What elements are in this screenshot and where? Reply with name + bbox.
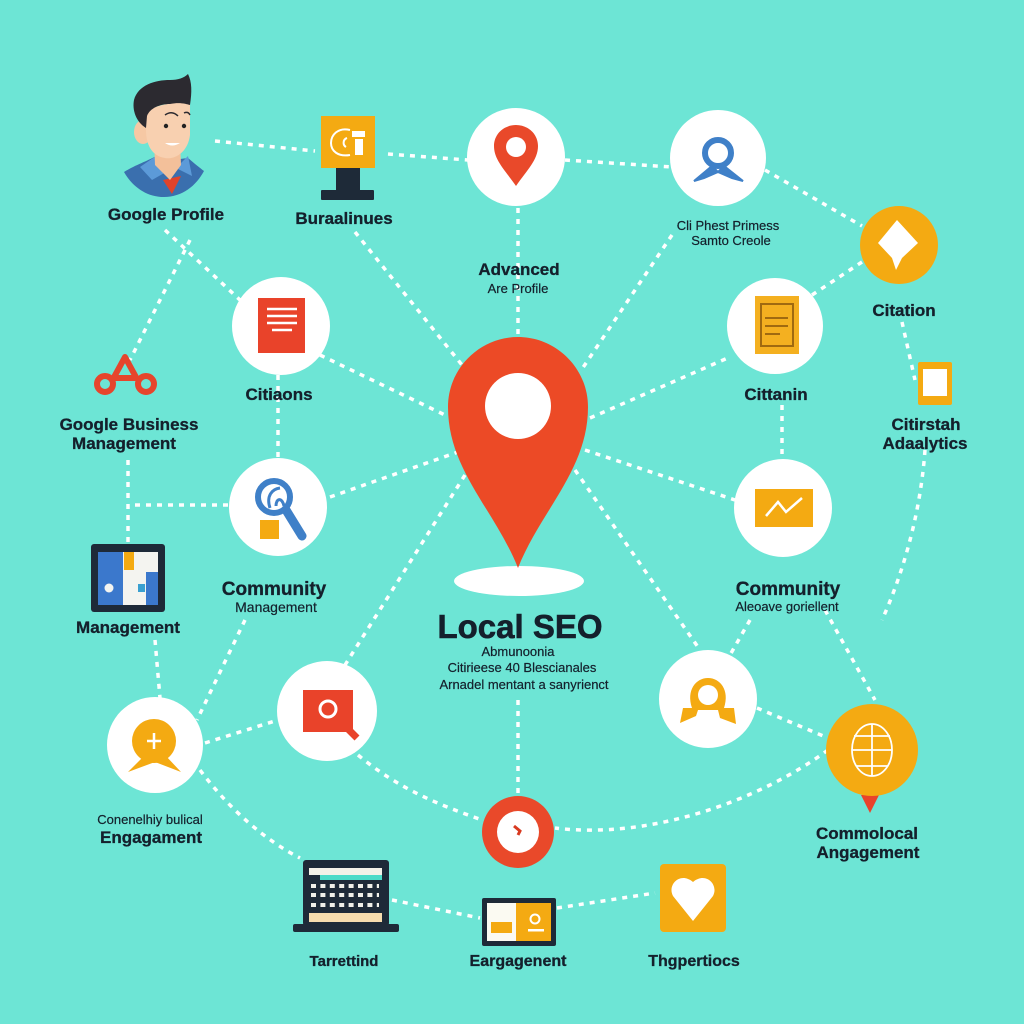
label: Advanced Profile xyxy=(478,260,560,296)
label: Commolocal Angagement xyxy=(816,824,920,862)
title: Local SEO: Abmunoonia xyxy=(482,644,555,659)
label: Google Business Management xyxy=(60,415,198,453)
title: Local SEO xyxy=(437,608,609,692)
icon: heart tile xyxy=(660,864,726,932)
icon: yellow board xyxy=(321,116,375,200)
label: Commolocal Angagement: Commolocal xyxy=(816,824,918,843)
label: Engagement left: Engagament xyxy=(100,828,202,847)
icon: tablet Eargagement xyxy=(482,898,556,946)
label: Management: Management xyxy=(76,618,180,637)
label: Google Business Management: Management xyxy=(72,434,176,453)
icon: yellow document circle xyxy=(727,278,823,374)
label: Citations: Citiaons xyxy=(245,385,313,404)
icon: yellow person circle xyxy=(659,650,757,748)
title: Local SEO: Arnadel mentant a sanyrienct xyxy=(439,677,609,692)
label: Tarrettind: Tarrettind xyxy=(310,953,378,970)
label: Cil Phest Primess: Samto Creole xyxy=(691,233,771,248)
label: Community Management left: Management xyxy=(235,599,317,615)
icon: yellow plus circle xyxy=(107,697,203,793)
label: Community right: Community xyxy=(736,579,841,600)
label: Buraalinues: Buraalinues xyxy=(295,209,393,228)
label: Google Business Management: Google Business xyxy=(60,415,198,434)
label: Engagement left xyxy=(97,812,203,847)
icon: red scissors A xyxy=(97,357,154,392)
icon: blue person circle xyxy=(670,110,766,206)
label: Advanced Profile: Advanced xyxy=(478,260,560,279)
label: Thgpertiocs: Thgpertiocs xyxy=(648,953,740,970)
label: Google Profile: Google Profile xyxy=(108,205,224,224)
label: Advanced Profile: Are Profile xyxy=(488,281,548,296)
label: Community right xyxy=(735,579,841,614)
icon: tablet Management xyxy=(91,544,165,612)
icon: red search circle xyxy=(277,661,377,761)
title: Local SEO: Local SEO xyxy=(437,608,603,645)
icon: magnifier circle xyxy=(229,458,327,556)
label: Cil Phest Primess xyxy=(677,218,780,248)
label: Community Management left: Community xyxy=(222,579,327,600)
label: Citirstah Adaalytics: Citirstah xyxy=(892,415,960,434)
icon: person Google Profile xyxy=(124,74,204,197)
icon: red document circle xyxy=(232,277,330,375)
label: Cittanin: Cittanin xyxy=(744,385,808,404)
map pin: central marker xyxy=(448,337,588,596)
label: Citirstah Adaalytics xyxy=(882,415,968,453)
label: Eargagenent: Eargagenent xyxy=(470,953,567,970)
icon: red clock xyxy=(482,796,554,868)
icon: small yellow tablet xyxy=(918,362,952,405)
icon: yellow citation circle xyxy=(860,206,938,284)
label: Citirstah Adaalytics: Adaalytics xyxy=(882,434,968,453)
icon: globe pin xyxy=(826,704,918,813)
label: Community Management left xyxy=(222,579,327,615)
label: Engagement left: Conenelhiy bulical xyxy=(97,812,203,827)
label: Community right: Aleoave goriellent xyxy=(735,599,839,614)
icon: laptop xyxy=(293,860,399,932)
label: Cil Phest Primess: Cli Phest Primess xyxy=(677,218,780,233)
icon: chart circle xyxy=(734,459,832,557)
icon: location circle xyxy=(467,108,565,206)
label: Citation: Citation xyxy=(872,301,936,320)
label: Commolocal Angagement: Angagement xyxy=(817,843,920,862)
title: Local SEO: Citirieese 40 Blescianales xyxy=(448,660,597,675)
